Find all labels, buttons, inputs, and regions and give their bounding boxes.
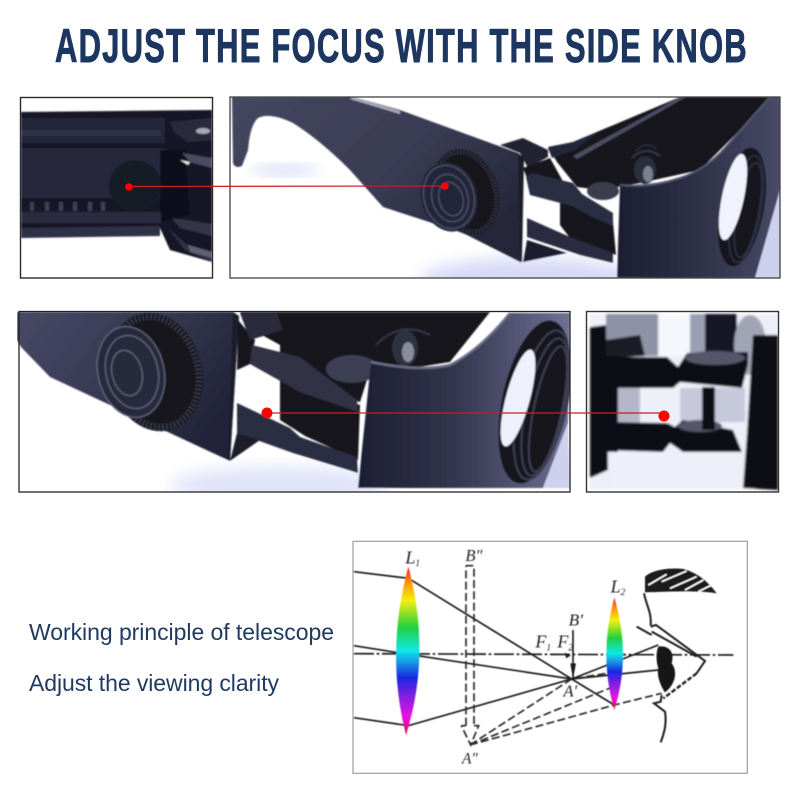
temple arm plate (232, 97, 523, 262)
hinges and links (500, 138, 548, 168)
back frame (548, 97, 770, 190)
links (250, 345, 358, 412)
labels: F (557, 632, 568, 652)
right block (743, 335, 778, 490)
labels (404, 546, 626, 767)
labels: B′ (569, 611, 583, 630)
callout: link connector line (262, 408, 670, 422)
lens hole (718, 147, 766, 267)
chart: telescope optical diagram (353, 541, 747, 773)
plate edge (518, 153, 524, 262)
lower arm (603, 420, 742, 452)
upper arm (607, 352, 748, 388)
back frame (240, 312, 490, 402)
labels: A″ (461, 750, 478, 767)
text: working principle: Working principle of telescope (29, 619, 334, 645)
labels: L (405, 547, 415, 567)
labels: B″ (465, 546, 484, 565)
right lens housing (358, 313, 570, 488)
right lens housing (617, 97, 780, 278)
background shadows (418, 244, 644, 278)
icon: eye profile (637, 569, 717, 742)
left block (590, 325, 608, 478)
labels: L (611, 576, 621, 596)
callout: knob connector line (125, 182, 449, 191)
lens hole (498, 320, 570, 484)
labels: 1 (415, 559, 420, 569)
labels: F (535, 632, 546, 652)
panel: link mechanism close-up (586, 312, 778, 492)
panel: enlarged knob and lens housing (17, 302, 585, 503)
arrow: image B' (570, 630, 576, 679)
labels: 2 (568, 643, 573, 653)
knob (120, 312, 204, 432)
text: viewing clarity: Adjust the viewing clarity (29, 670, 280, 696)
knob (437, 148, 500, 236)
labels: 1 (546, 643, 551, 653)
lens L1 (396, 567, 419, 735)
panel: inner rack close-up (20, 98, 212, 278)
panel: glasses with side knob (230, 97, 780, 302)
labels: 2 (621, 588, 626, 598)
arrow: focus F2 (565, 653, 571, 658)
rays (354, 572, 733, 726)
title: ADJUST THE FOCUS WITH THE SIDE KNOB (55, 21, 747, 73)
shadow (170, 467, 390, 503)
vertical link (702, 387, 715, 430)
labels: A′ (562, 681, 578, 700)
plate (17, 312, 239, 461)
lens L2 (606, 598, 623, 710)
